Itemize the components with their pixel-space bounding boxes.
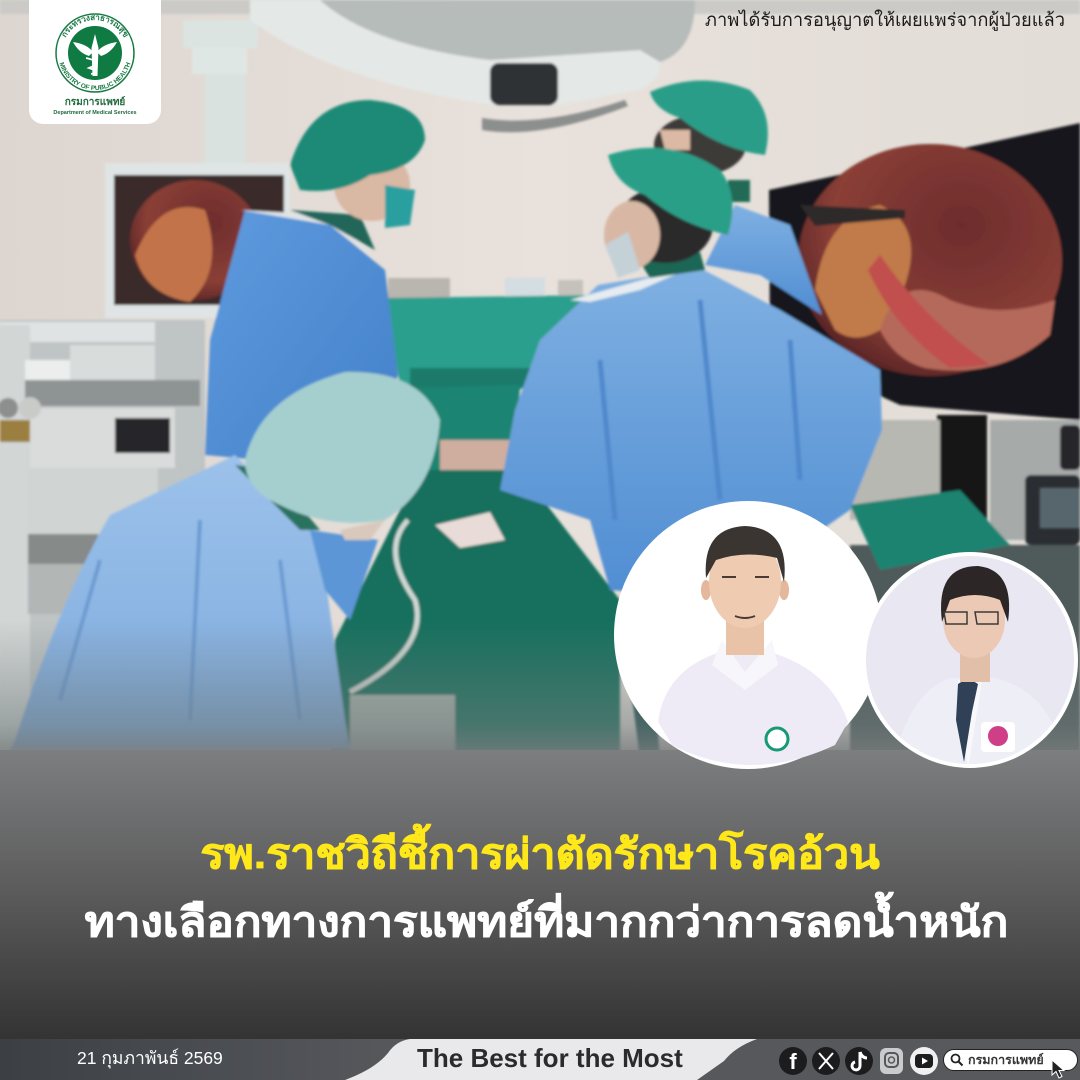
bottom fade xyxy=(0,620,1080,760)
ceiling column xyxy=(183,20,258,179)
icon: facebook: f xyxy=(789,1049,797,1074)
icon: instagram xyxy=(880,1048,903,1074)
icon: tiktok xyxy=(845,1047,873,1075)
dark panel xyxy=(0,750,1080,1040)
front nurse xyxy=(10,372,440,750)
department name english: Department of Medical Services xyxy=(53,110,137,116)
drape back xyxy=(385,295,600,390)
search pill xyxy=(943,1049,1078,1071)
cursor icon xyxy=(1052,1061,1066,1079)
back-left surgeon xyxy=(205,100,425,470)
search text: กรมการแพทย์ xyxy=(968,1053,1044,1067)
logo card xyxy=(29,0,161,124)
headline xyxy=(84,824,1008,945)
icon: youtube xyxy=(910,1047,938,1075)
wall xyxy=(0,0,1080,760)
patient table xyxy=(330,385,660,760)
far-right surgeon xyxy=(650,80,822,315)
permission note: ภาพได้รับการอนุญาตให้เผยแพร่จากผู้ป่วยแล้ว xyxy=(705,9,1065,30)
emblem: กระทรวงสาธารณสุข xyxy=(62,15,128,38)
photo: operating room scene xyxy=(0,0,1080,750)
left equipment xyxy=(0,320,205,760)
wall boards xyxy=(388,278,583,318)
right equipment xyxy=(850,420,1080,760)
ceiling strip xyxy=(0,0,1080,14)
center surgeon xyxy=(500,148,882,600)
emblem: MINISTRY OF PUBLIC HEALTH xyxy=(60,62,130,90)
scene objects xyxy=(0,0,1080,760)
footer bar xyxy=(0,1039,1080,1080)
emblem xyxy=(55,13,135,93)
headline line 2: ทางเลือกทางการแพทย์ที่มากกว่าการลดน้ำหนัก xyxy=(85,899,1008,945)
social icons xyxy=(779,1047,938,1075)
icon: X xyxy=(812,1047,840,1075)
portrait: second doctor xyxy=(866,552,1078,768)
left monitor xyxy=(105,163,290,318)
monitor stand xyxy=(937,415,987,520)
slogan: The Best for the Most xyxy=(417,1043,683,1073)
right monitor xyxy=(769,123,1080,420)
portrait: first doctor xyxy=(614,501,878,769)
search icon xyxy=(950,1054,964,1066)
surgical lamp xyxy=(250,0,695,132)
footer slogan band xyxy=(345,1039,757,1080)
headline line 1: รพ.ราชวิถีชี้การผ่าตัดรักษาโรคอ้วน xyxy=(200,831,880,877)
department name: กรมการแพทย์ xyxy=(65,97,125,108)
icon: facebook xyxy=(779,1047,807,1075)
date: 21 กุมภาพันธ์ 2569 xyxy=(77,1048,223,1068)
